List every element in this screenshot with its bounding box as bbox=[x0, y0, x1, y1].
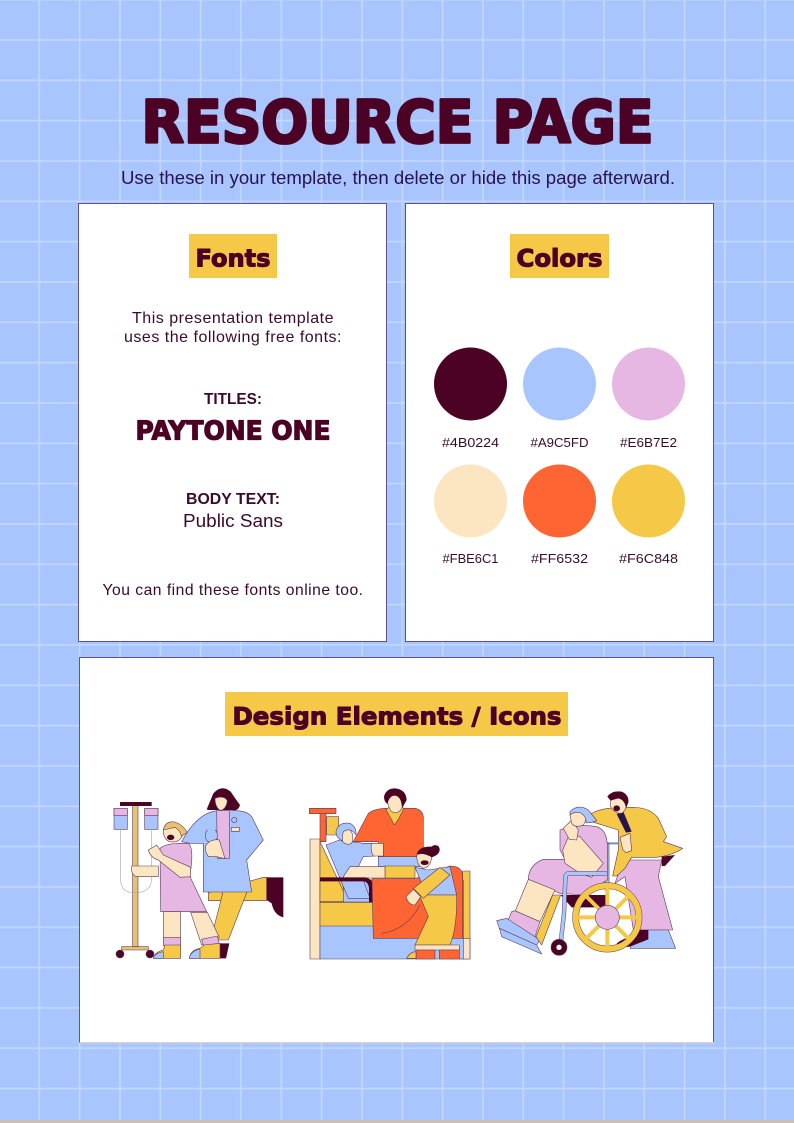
text block: note: You can find these fonts online too. bbox=[102, 582, 364, 599]
text block: titles font: PAYTONE ONE bbox=[136, 416, 330, 446]
IV stand bbox=[133, 805, 138, 947]
patient bbox=[326, 840, 375, 898]
text block: intro: This presentation template bbox=[132, 310, 334, 327]
swatch: 4B0224 bbox=[434, 348, 507, 450]
carer coat back and skirt bbox=[615, 860, 673, 930]
swatch: A9C5FD bbox=[523, 348, 596, 450]
text block: titles font: TITLES: bbox=[204, 391, 262, 408]
panel: fonts bbox=[78, 204, 386, 642]
swatch: E6B7E2: #E6B7E2 bbox=[620, 435, 677, 450]
doctor coat bbox=[182, 811, 263, 892]
swatch: FBE6C1 bbox=[434, 464, 507, 566]
icon: carer with patient in wheelchair bbox=[497, 791, 683, 955]
swatch: 4B0224: #4B0224 bbox=[442, 435, 499, 450]
doctor back leg and shoe bbox=[208, 877, 267, 901]
subtitle: Use these in your template, then delete or hide this page afterward. bbox=[121, 168, 675, 188]
text block: body font: Public Sans bbox=[183, 511, 283, 531]
child dress bbox=[160, 843, 207, 912]
heading: colors bbox=[510, 234, 609, 278]
title: RESOURCE PAGE bbox=[142, 88, 654, 156]
swatch: FBE6C1: #FBE6C1 bbox=[442, 551, 498, 566]
child arms bbox=[132, 866, 158, 877]
girl bbox=[415, 867, 457, 895]
text block: intro bbox=[124, 310, 342, 346]
mattress and bed base bbox=[320, 880, 463, 903]
IV stand bbox=[309, 808, 336, 814]
swatch: F6C848 bbox=[612, 464, 685, 566]
heading: fonts: Fonts bbox=[196, 244, 270, 272]
text block: body font bbox=[183, 491, 283, 531]
bed headboard and footboard bbox=[310, 839, 320, 959]
carer head bbox=[611, 796, 627, 813]
swatch: FF6532 bbox=[523, 464, 596, 566]
swatch: A9C5FD: #A9C5FD bbox=[530, 435, 588, 450]
heading: design elements: Design Elements / Icons bbox=[232, 702, 562, 730]
text block: intro: uses the following free fonts: bbox=[124, 329, 342, 346]
heading: colors: Colors bbox=[516, 244, 602, 272]
panel: colors bbox=[406, 204, 714, 642]
doctor hair bbox=[207, 788, 240, 810]
swatch: F6C848: #F6C848 bbox=[619, 551, 678, 566]
swatch: FF6532: #FF6532 bbox=[531, 551, 588, 566]
wheelchair back frame bbox=[607, 840, 618, 846]
child head bbox=[163, 823, 183, 842]
patient legs bbox=[515, 879, 555, 922]
patient bbox=[528, 826, 607, 895]
text block: titles font bbox=[136, 391, 330, 446]
icon: doctor and child with IV stand bbox=[114, 788, 283, 958]
panel: design elements bbox=[80, 658, 714, 1044]
doctor front leg bbox=[211, 859, 247, 940]
father bbox=[353, 808, 423, 862]
orange blanket bbox=[372, 866, 463, 938]
wheelchair frame bbox=[561, 895, 606, 907]
heading: fonts bbox=[189, 234, 277, 278]
swatch: E6B7E2 bbox=[612, 348, 685, 450]
heading: design elements bbox=[225, 692, 568, 736]
icon: family at hospital bed bbox=[309, 788, 470, 959]
carer jacket bbox=[592, 807, 683, 876]
child legs and shoes bbox=[163, 912, 181, 938]
wheel bbox=[576, 886, 639, 949]
text block: body font: BODY TEXT: bbox=[186, 491, 280, 508]
